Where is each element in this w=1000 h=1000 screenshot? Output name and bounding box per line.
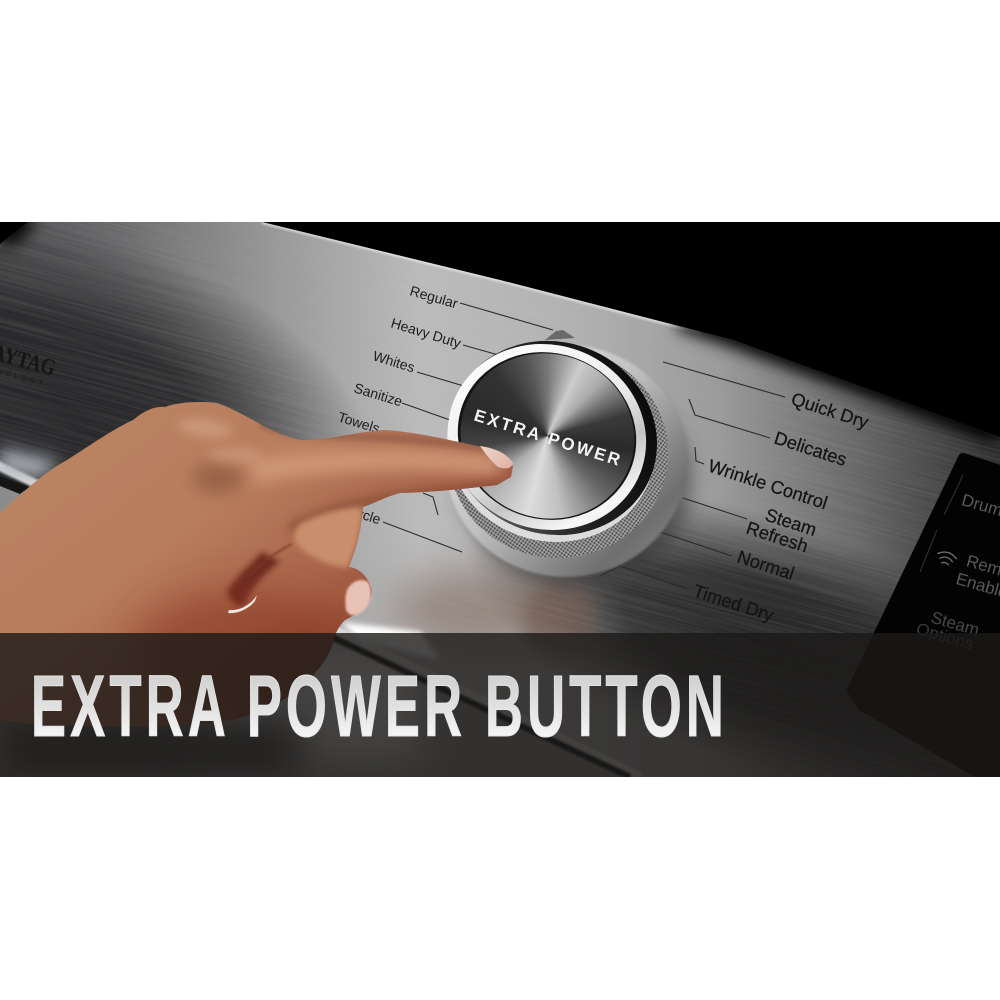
index nail bbox=[480, 446, 513, 468]
cycle labels: left: Regular bbox=[408, 283, 460, 311]
black photo background bbox=[0, 222, 1000, 437]
inner rim bbox=[458, 352, 636, 520]
knuckle shading bbox=[192, 462, 244, 494]
title banner bbox=[0, 633, 1000, 777]
knob shadow bbox=[450, 416, 701, 591]
chrome lower band bbox=[447, 423, 652, 542]
stainless control panel bbox=[0, 222, 1000, 777]
palm shade bbox=[124, 579, 344, 633]
thumb nail bbox=[345, 580, 371, 615]
hand silhouette bbox=[0, 402, 513, 727]
cycle labels: right bbox=[600, 362, 872, 626]
cycle labels: left: Towels bbox=[336, 409, 382, 436]
chrome ring bbox=[448, 344, 646, 530]
product photo scene bbox=[0, 222, 1000, 777]
crease bbox=[250, 544, 292, 575]
skin shading bbox=[124, 416, 508, 633]
black display panel: Steam bbox=[929, 608, 981, 640]
cycle labels: left bbox=[340, 286, 554, 552]
dial text: EXTRA POWER bbox=[472, 406, 622, 470]
ring glint bbox=[228, 595, 257, 613]
cycle labels: right: Refresh bbox=[744, 518, 811, 556]
curled finger shadow bbox=[227, 552, 280, 606]
metal disc bbox=[460, 353, 634, 519]
cycle labels: left: Sanitize bbox=[352, 380, 405, 409]
cycle labels: right: Quick Dry bbox=[789, 389, 872, 433]
black bezel bbox=[468, 340, 657, 536]
hand bbox=[0, 402, 513, 727]
black display panel: Options bbox=[914, 619, 976, 654]
cycle labels: right: Wrinkle Control bbox=[706, 456, 830, 513]
curled finger bbox=[294, 507, 362, 568]
finger light streak bbox=[250, 460, 500, 472]
finger top shadow bbox=[260, 424, 490, 448]
chrome rail bbox=[0, 448, 640, 777]
cycle labels: right: Timed Dry bbox=[691, 581, 777, 626]
cycle labels: right: Normal bbox=[735, 547, 797, 584]
cycle labels: left: Heavy Duty bbox=[389, 315, 463, 351]
finger underside shadow bbox=[290, 486, 505, 530]
cycle labels: right: Steam bbox=[763, 505, 819, 540]
lower appliance body bbox=[0, 460, 660, 777]
cycle labels: left: Bulky Cycle bbox=[308, 491, 383, 527]
outer collar bbox=[445, 345, 687, 577]
brand logo bbox=[0, 346, 55, 384]
icon: wifi bbox=[937, 551, 958, 566]
knurled ring bbox=[448, 348, 668, 558]
knuckle highlights bbox=[178, 416, 232, 440]
cycle labels: right: Delicates bbox=[772, 428, 849, 470]
extra power dial bbox=[446, 330, 701, 591]
pointer bbox=[545, 330, 575, 340]
cycle labels: left: Whites bbox=[371, 348, 417, 375]
black display panel bbox=[852, 458, 1000, 772]
